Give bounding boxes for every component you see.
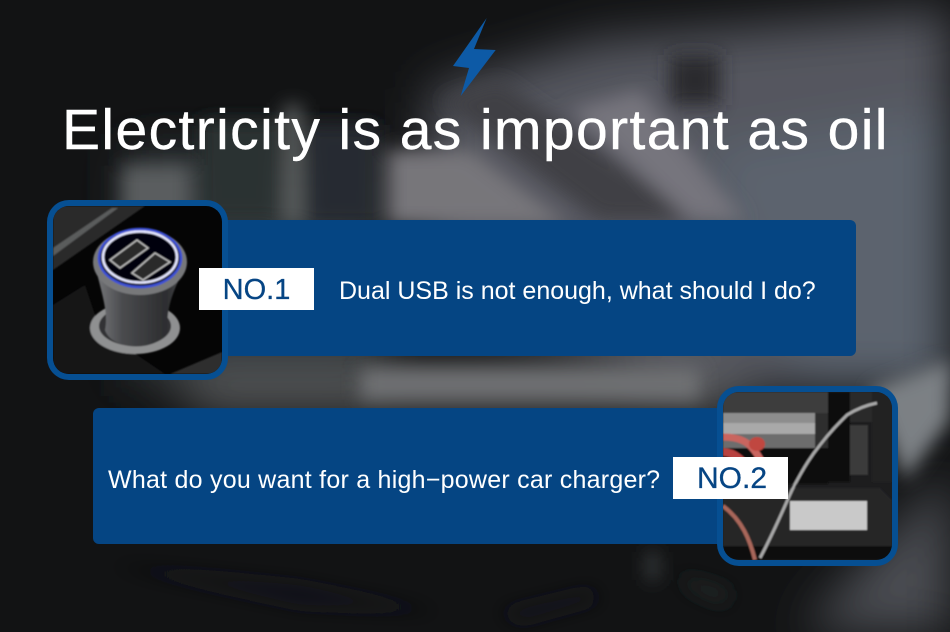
panel: NO.2 blue bar: [93, 408, 733, 544]
NO.2 question text: What do you want for a high−power car charger?: [108, 466, 660, 494]
icon: lightning bolt: [453, 18, 496, 96]
icon: car battery photo: [717, 386, 898, 566]
NO.2 label: NO.2: [697, 462, 767, 495]
icon: USB car charger photo: [47, 200, 228, 380]
panel: NO.1 row: [47, 200, 856, 380]
NO.1 label: [199, 268, 314, 310]
title: Electricity is as important as oil: [62, 98, 889, 162]
NO.1 question text: Dual USB is not enough, what should I do?: [339, 277, 816, 305]
NO.2 label: [673, 457, 788, 499]
panel: NO.2 row: [93, 386, 898, 566]
panel: NO.1 blue bar: [217, 220, 856, 356]
NO.1 label: NO.1: [223, 274, 290, 306]
